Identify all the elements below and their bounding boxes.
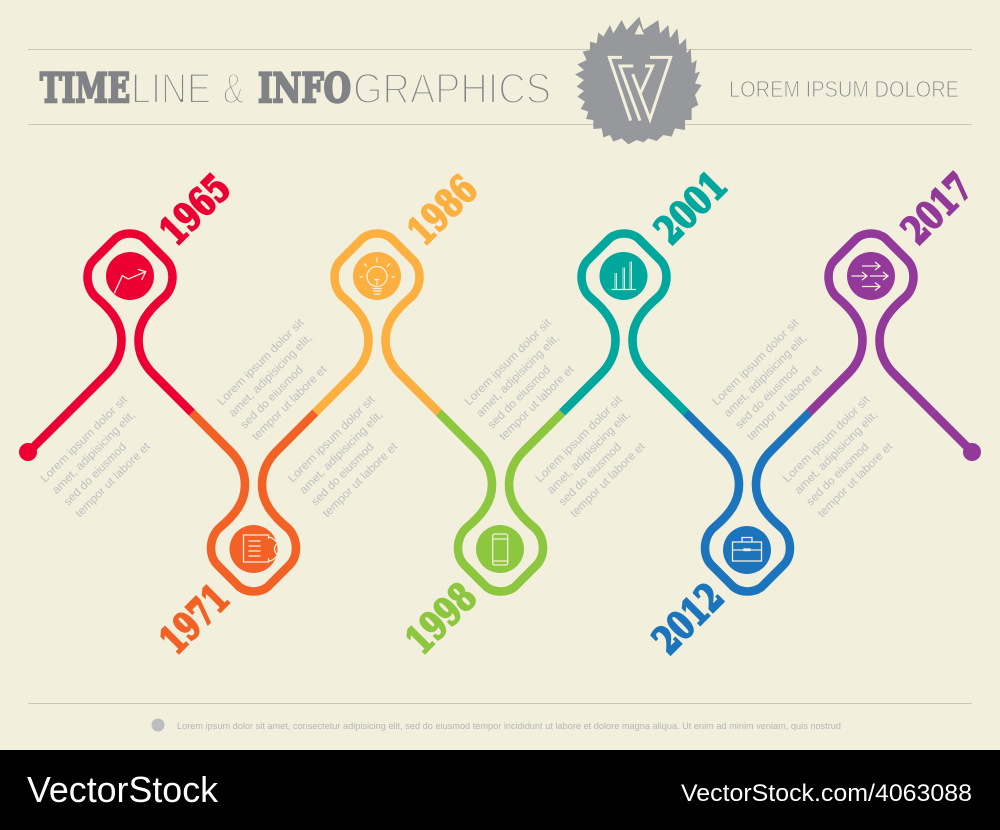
text block 1: tempor ut labore et <box>73 440 153 520</box>
text block 7: Lorem ipsum dolor sit <box>781 393 873 485</box>
title: TIME <box>40 65 130 112</box>
node: 2012 <box>644 412 809 662</box>
text block 2: Lorem ipsum dolor sit <box>215 316 307 408</box>
icon: document <box>244 535 278 562</box>
text block 7: sed do eiusmod <box>804 441 872 508</box>
text block 4: Lorem ipsum dolor sit <box>463 316 554 408</box>
text block 4: sed do eiusmod <box>486 364 553 431</box>
text block 2 <box>215 316 342 443</box>
text block 5: amet, adipisicing elit, <box>545 409 633 497</box>
text block 1: amet, adipisicing elit, <box>50 409 138 497</box>
text block 3 <box>286 393 413 520</box>
text block 1: sed do eiusmod <box>62 441 129 508</box>
text block 6 <box>710 316 837 443</box>
watermark band <box>0 750 1000 830</box>
icon: bar chart <box>612 262 636 290</box>
text block 5: tempor ut labore et <box>568 440 648 520</box>
text block 1 <box>39 393 165 520</box>
text block 4: tempor ut labore et <box>497 363 577 443</box>
footer bullet <box>152 718 164 732</box>
title <box>40 65 551 113</box>
year 2017: 2017 <box>893 164 981 252</box>
title: GRAPHICS <box>353 65 551 113</box>
node: 1998 <box>397 412 562 662</box>
text block 7: tempor ut labore et <box>816 440 896 520</box>
year 1971: 1971 <box>151 575 238 662</box>
start dot <box>19 412 68 461</box>
text block 4 <box>463 316 589 443</box>
watermark logo: VectorStock <box>27 769 219 810</box>
node: 2017 <box>809 164 981 412</box>
footer note: Lorem ipsum dolor sit amet, consectetur adipisicing elit, sed do eiusmod tempor incididunt ut labore et dolore magna aliqua. Ut enim ad minim veniam, quis nostrud <box>177 721 841 732</box>
text block 3: sed do eiusmod <box>309 441 377 508</box>
icon: briefcase <box>732 538 762 561</box>
node: 2001 <box>562 163 735 412</box>
text block 2: tempor ut labore et <box>250 363 330 443</box>
text block 3: tempor ut labore et <box>321 440 401 520</box>
title: INFO <box>258 65 351 112</box>
text block 6: Lorem ipsum dolor sit <box>710 316 802 408</box>
text block 6: tempor ut labore et <box>745 363 825 443</box>
node: 1971 <box>151 412 315 662</box>
text block 7 <box>781 393 908 520</box>
text block 1: Lorem ipsum dolor sit <box>39 393 130 485</box>
icon: rising chart <box>114 269 146 293</box>
title: LINE <box>131 65 211 113</box>
text block 5: sed do eiusmod <box>557 441 624 508</box>
text block 6: sed do eiusmod <box>734 364 801 431</box>
node: 1965 <box>68 165 239 412</box>
year 2001: 2001 <box>646 163 735 252</box>
text block 5: Lorem ipsum dolor sit <box>534 393 625 485</box>
logo badge <box>575 17 702 144</box>
text block 4: amet, adipisicing elit, <box>474 332 562 420</box>
text block 7: amet, adipisicing elit, <box>793 409 880 497</box>
year 1998: 1998 <box>397 574 485 662</box>
text block 3: Lorem ipsum dolor sit <box>286 393 378 485</box>
subtitle: LOREM IPSUM DOLORE <box>729 76 959 102</box>
year 1965: 1965 <box>151 165 239 253</box>
text block 6: amet, adipisicing elit, <box>722 332 810 420</box>
year 2012: 2012 <box>644 574 732 662</box>
year 1986: 1986 <box>399 166 486 253</box>
watermark id: VectorStock.com/4063088 <box>681 780 972 807</box>
text block 2: amet, adipisicing elit, <box>227 332 315 420</box>
icon: light bulb <box>360 258 395 294</box>
icon: phone <box>493 534 508 565</box>
text block 2: sed do eiusmod <box>239 364 306 431</box>
node: 1986 <box>315 166 486 412</box>
text block 5 <box>534 393 660 520</box>
icon: arrows <box>852 262 888 290</box>
text block 3: amet, adipisicing elit, <box>298 409 385 497</box>
end dot <box>933 412 981 461</box>
title: & <box>223 65 244 113</box>
